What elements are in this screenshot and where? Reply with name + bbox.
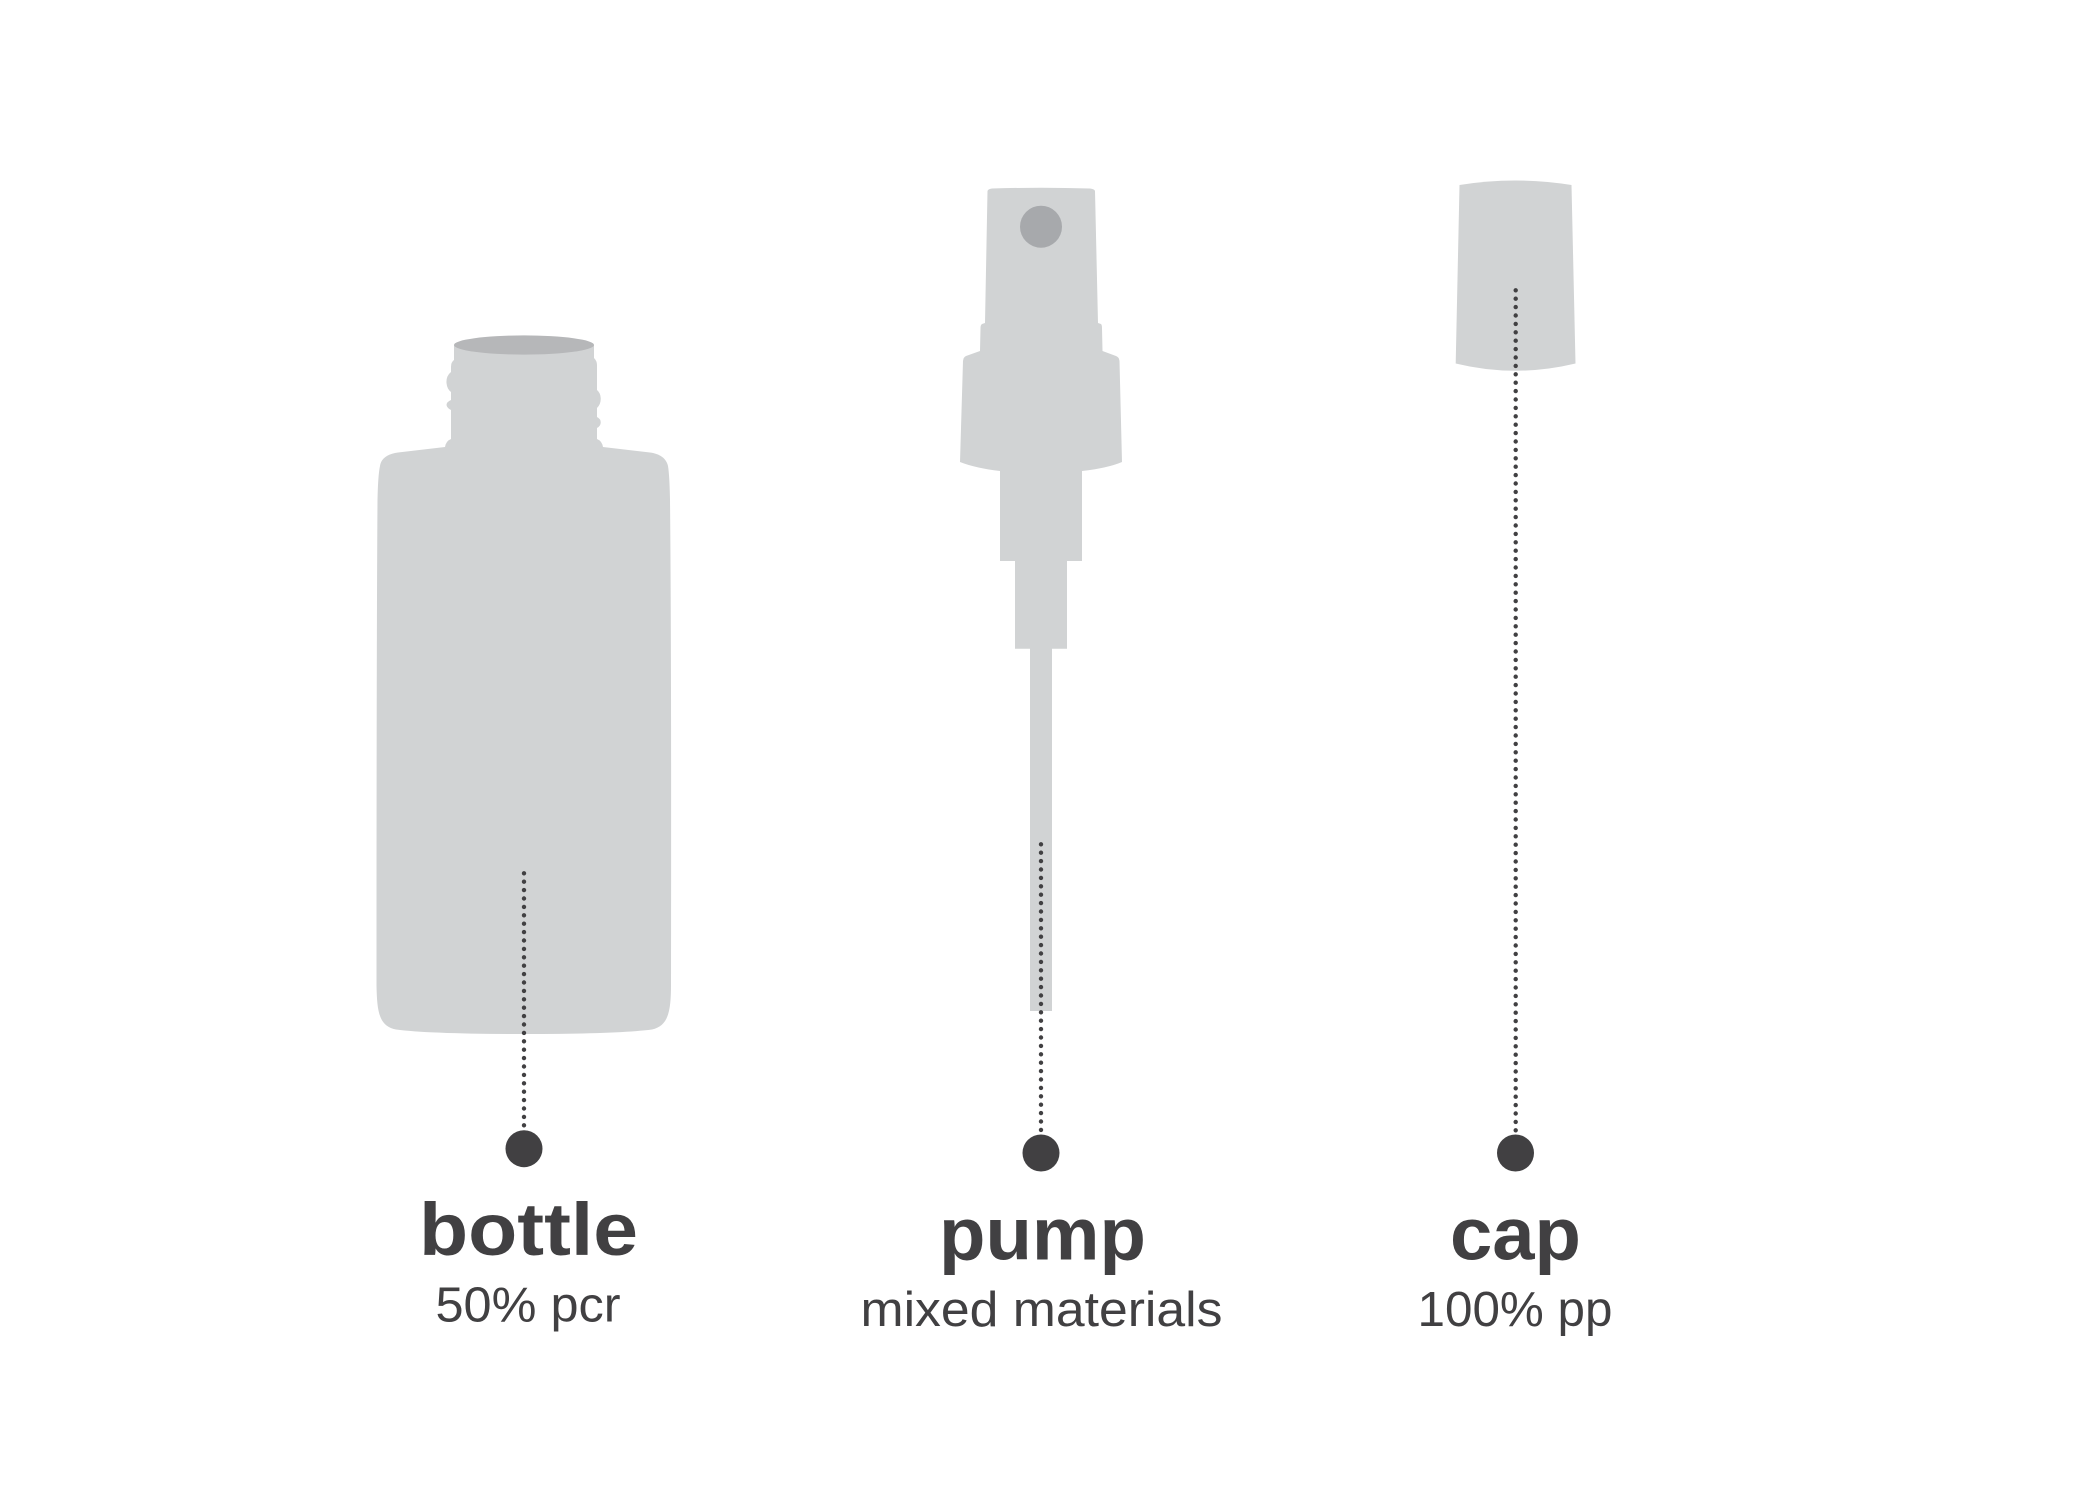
- heading: cap: cap: [1450, 1192, 1581, 1276]
- leader line: cap: [1513, 290, 1518, 1131]
- label: mixed materials: mixed materials: [860, 1283, 1222, 1337]
- panel: pump: [860, 188, 1222, 1337]
- panel: cap: [1418, 180, 1612, 1337]
- panel: bottle: [376, 335, 671, 1333]
- marker dot: cap: [1497, 1134, 1534, 1172]
- label: 100% pp: 100% pp: [1418, 1283, 1612, 1337]
- leader line: bottle: [522, 873, 526, 1126]
- icon: bottle silhouette: [376, 345, 671, 1034]
- icon: bottle opening: [454, 335, 594, 355]
- icon: pump nozzle: [1020, 206, 1062, 248]
- icon: cap silhouette: [1456, 180, 1576, 371]
- heading: bottle: bottle: [419, 1188, 638, 1271]
- marker dot: bottle: [506, 1130, 542, 1167]
- leader line: pump: [1039, 844, 1043, 1130]
- heading: pump: pump: [939, 1192, 1146, 1276]
- label: 50% pcr: 50% pcr: [436, 1279, 620, 1333]
- icon: pump silhouette: [960, 188, 1122, 1011]
- marker dot: pump: [1022, 1134, 1060, 1172]
